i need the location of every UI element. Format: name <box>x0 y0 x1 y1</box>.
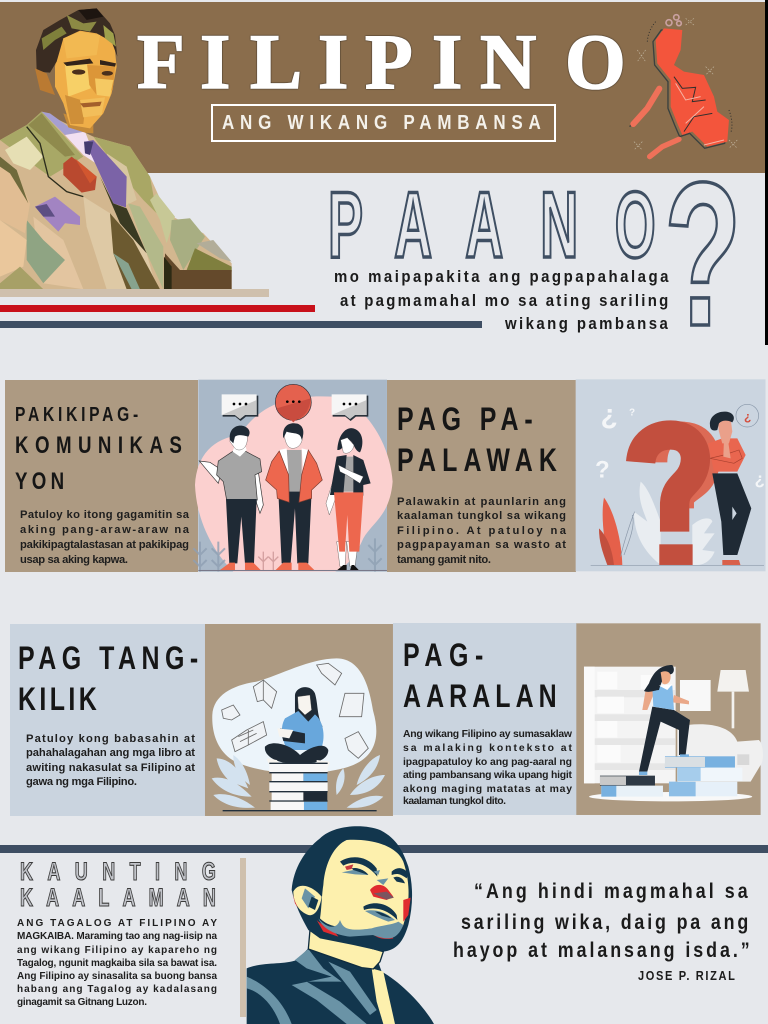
quotation: sariling wika, daig pa ang <box>461 911 748 934</box>
thought bubble: ¿ <box>744 409 751 423</box>
panel: pag-aaralan text: PAG- <box>403 638 483 674</box>
icon: Philippines map <box>630 15 737 157</box>
panel: pag-aaralan text: kaalaman tungkol dito. <box>403 796 506 807</box>
panel: pakikipagkomunikasyon text: usap sa aking kapwa. <box>20 554 128 566</box>
marks: floating question marks: ? <box>629 408 635 419</box>
books: steps <box>600 756 742 797</box>
panel: pag papalawak text: Palawakin at paunlarin ang <box>397 496 566 508</box>
person: man in red jacket <box>266 423 322 571</box>
text block: tagalog at filipino <box>17 918 217 1008</box>
text block: tagalog at filipino: Tagalog, ngunit magkaiba sila sa bawat isa. <box>17 958 217 969</box>
heading: kaunting kaalaman <box>20 857 216 912</box>
text block: tagalog at filipino: ang wikang Filipino ay kapareho ng <box>17 945 217 956</box>
illustration: three people talking <box>193 380 393 572</box>
panel: pag tangkilik text: pahahalagahan ang mga libro at <box>26 747 195 759</box>
panel: pag-aaralan text: Ang wikang Filipino ay sumasaklaw <box>403 729 573 740</box>
text block: tagalog at filipino: Ang Filipino ay sinasalita sa buong bansa <box>17 971 217 982</box>
panel: pakikipagkomunikasyon text: KOMUNIKAS <box>15 432 182 459</box>
text block: tagalog at filipino: habang ang Tagalog ay kadalasang <box>17 984 217 995</box>
panel: pag tangkilik text <box>10 624 205 816</box>
icon: red question mark <box>641 432 710 565</box>
header band <box>0 2 765 173</box>
panel: pag tangkilik text: KILIK <box>18 682 97 718</box>
quotation: hayop at malansang isda.” <box>453 939 750 962</box>
marks: floating question marks <box>595 398 765 488</box>
thought bubble <box>736 404 759 427</box>
text block: tagalog at filipino: ANG TAGALOG AT FILIPINO AY <box>17 918 217 929</box>
speech bubble: left <box>222 394 258 421</box>
panel: pag-aaralan text: sa malaking konteksto at <box>403 743 573 754</box>
stack of books <box>223 763 377 811</box>
person: man in grey shirt <box>199 426 263 570</box>
speech bubble: centre red <box>275 384 311 422</box>
panel: pakikipagkomunikasyon text: aking pang-araw-araw na <box>20 524 190 536</box>
heading: kaunting kaalaman: KAALAMAN <box>20 883 216 912</box>
person: thinking woman <box>708 412 751 566</box>
illustration: woman and red question mark <box>576 379 768 571</box>
panel: pag-aaralan text <box>393 623 577 815</box>
panel: pag papalawak text: kaalaman tungkol sa wikang <box>397 510 566 522</box>
portrait: Jose Rizal poster <box>247 826 434 1024</box>
panel: pag papalawak text: PALAWAK <box>397 443 557 479</box>
panel: pag papalawak text: PAG PA- <box>397 402 533 438</box>
panel: pakikipagkomunikasyon text: PAKIKIPAG- <box>15 403 138 425</box>
marks: floating question marks: ¿ <box>755 469 765 488</box>
panel: pag-aaralan text: ipagpapatuloy ko ang pag-aaral ng <box>403 757 572 768</box>
subtitle box <box>212 105 555 141</box>
quotation <box>453 880 750 983</box>
subheading text: wikang pambansa <box>504 315 668 333</box>
vertical beige bar <box>240 858 246 1017</box>
quotation: “Ang hindi magmahal sa <box>474 880 748 903</box>
heading: kaunting kaalaman: KAUNTING <box>20 857 216 886</box>
title: FILIPINO <box>137 18 626 105</box>
leaves: light blue <box>212 755 385 808</box>
leaves: white plant <box>634 482 715 565</box>
panel: pag tangkilik text: PAG TANG- <box>18 641 198 677</box>
panel: pag papalawak text: Filipino. At patuloy na <box>397 525 567 537</box>
panel: pag papalawak text <box>387 380 576 572</box>
speech bubble: right <box>332 394 368 421</box>
subheading text <box>334 268 668 333</box>
marks: floating question marks: ¿ <box>601 398 618 429</box>
panel: pag tangkilik text: awiting nakasulat sa Filipino at <box>26 762 195 774</box>
panel: pakikipagkomunikasyon text: pakikipagtalastasan at pakikipag <box>20 539 189 551</box>
floating books <box>222 663 368 758</box>
marks: floating question marks: ? <box>595 457 610 484</box>
text block: tagalog at filipino: MAGKAIBA. Maraming tao ang nag-iisip na <box>17 931 217 942</box>
panel: pag-aaralan text: akong maging matatas at may <box>403 784 572 795</box>
person: woman stepping up <box>639 665 690 775</box>
portrait: low-poly man in suit <box>0 8 232 289</box>
subtitle box: ANG WIKANG PAMBANSA <box>222 111 541 133</box>
quotation: JOSE P. RIZAL <box>638 968 735 983</box>
floor lamp <box>717 670 749 728</box>
panel: pag papalawak text: tamang gamit nito. <box>397 554 491 566</box>
subheading text: mo maipapakita ang pagpapahalaga <box>334 268 668 286</box>
accent bars <box>0 289 482 328</box>
panel: pag tangkilik text: Patuloy kong babasahin at <box>26 733 195 745</box>
navy divider <box>0 845 768 853</box>
sofa <box>677 724 763 782</box>
panel: pakikipagkomunikasyon text <box>5 380 198 572</box>
panel: pag-aaralan text: ating pambansang wika upang higit <box>403 770 573 781</box>
icon: large question mark: ? <box>664 141 742 369</box>
text block: tagalog at filipino: ginagamit sa Gitnang Luzon. <box>17 997 147 1008</box>
panel: pag tangkilik text: gawa ng mga Filipino. <box>26 776 137 788</box>
illustration: woman stepping on books <box>576 623 763 815</box>
plant: red leaf <box>599 498 635 565</box>
panel: pakikipagkomunikasyon text: Patuloy ko itong gagamitin sa <box>20 509 190 521</box>
illustration: woman reading on books <box>205 624 393 816</box>
person: reading woman <box>265 687 330 767</box>
panel: pag papalawak text: pagpapayaman sa wasto at <box>397 539 566 551</box>
subheading text: at pagmamahal mo sa ating sariling <box>340 292 668 310</box>
panel: pag-aaralan text: AARALAN <box>403 679 557 715</box>
panel: pakikipagkomunikasyon text: YON <box>15 468 64 495</box>
heading: PAANO: PAANO <box>328 173 656 278</box>
person: woman in black jacket <box>326 428 371 571</box>
bookshelf <box>584 667 676 783</box>
picture frame <box>680 680 711 711</box>
